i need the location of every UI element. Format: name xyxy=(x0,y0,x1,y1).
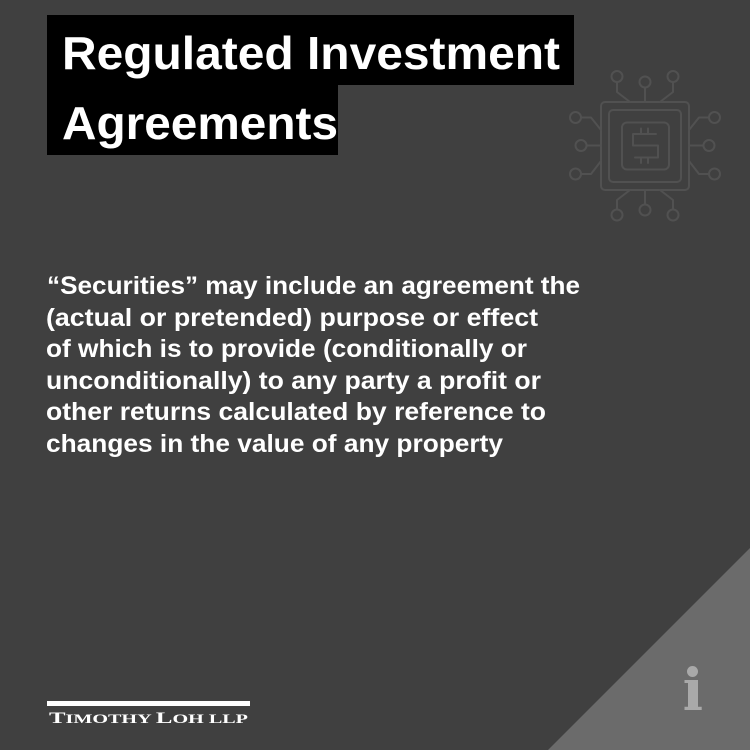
body text: of which is to provide (conditionally or xyxy=(46,335,527,363)
icon: chip with dollar sign xyxy=(570,71,720,220)
corner triangle xyxy=(548,548,750,750)
logo: Timothy Loh LLP xyxy=(47,701,250,727)
body text: (actual or pretended) purpose or effect xyxy=(46,304,539,332)
logo: Timothy Loh LLP: T IMOTHY L OH LLP xyxy=(49,710,248,727)
body text: changes in the value of any property xyxy=(46,430,503,458)
body text: unconditionally) to any party a profit or xyxy=(46,367,541,395)
title: Regulated Investment xyxy=(62,27,560,79)
title: Agreements xyxy=(62,97,338,149)
icon: info letter i xyxy=(684,666,702,710)
body text: “Securities” may include an agreement the xyxy=(47,272,580,300)
title xyxy=(47,15,574,155)
body text: other returns calculated by reference to xyxy=(46,398,546,426)
body text xyxy=(46,272,580,458)
